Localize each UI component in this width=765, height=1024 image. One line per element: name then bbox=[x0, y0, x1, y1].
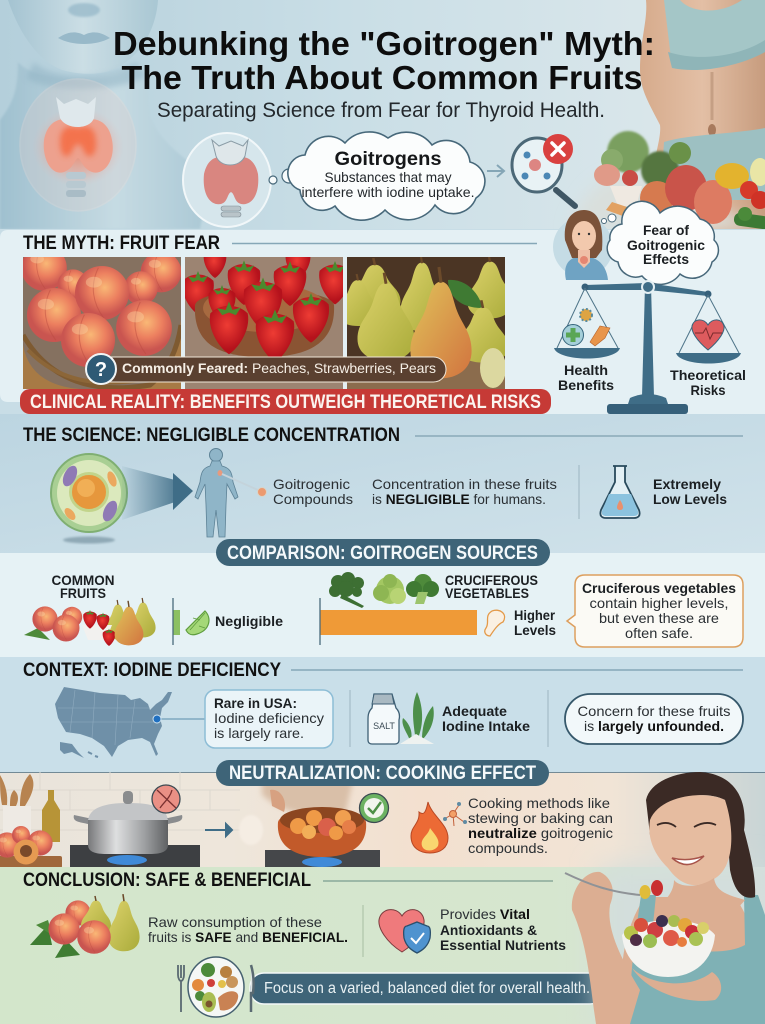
text: cooking methods: stewing or baking can bbox=[468, 810, 613, 826]
icon: human figure bbox=[195, 448, 266, 537]
thought cloud: fear of goitrogenic effects: Effects bbox=[643, 251, 689, 267]
thought cloud: fear of goitrogenic effects bbox=[602, 201, 718, 284]
icon: cruciferous vegetables bbox=[329, 572, 439, 608]
icon: health benefits bbox=[562, 309, 610, 346]
icon: salt shaker and seaweed bbox=[368, 692, 434, 744]
heading: context: CONTEXT: IODINE DEFICIENCY bbox=[23, 659, 281, 681]
text: cooking methods: compounds. bbox=[468, 840, 548, 856]
label: health benefits: Benefits bbox=[558, 377, 614, 393]
pill: concern unfounded: Concern for these fruits bbox=[578, 703, 730, 719]
text: adequate iodine intake: Adequate bbox=[442, 703, 507, 719]
banner: balanced diet: Focus on a varied, balanced diet for overall health. bbox=[264, 980, 590, 997]
text: cooking methods bbox=[468, 795, 613, 856]
text: goitrogenic compounds: Compounds bbox=[273, 491, 353, 507]
pill: concern unfounded: is largely unfounded. bbox=[584, 718, 724, 734]
text: adequate iodine intake bbox=[442, 703, 530, 734]
label: cruciferous vegetables bbox=[445, 572, 538, 601]
photo: utensils and jar bbox=[0, 774, 60, 842]
photo: steel pot on stove bbox=[70, 791, 200, 867]
callout: cruciferous note bbox=[567, 575, 743, 647]
text: adequate iodine intake: Iodine Intake bbox=[442, 718, 530, 734]
text: extremely low levels: Extremely bbox=[653, 476, 721, 492]
photo: dough bbox=[238, 816, 262, 844]
text: vital antioxidants: Provides Vital bbox=[440, 906, 530, 922]
bowl of fruit bbox=[622, 915, 721, 1001]
panel: the science bbox=[0, 414, 765, 554]
text: negligible concentration bbox=[372, 476, 557, 507]
label: health benefits bbox=[558, 362, 614, 393]
panel: cooking photo bbox=[0, 772, 765, 868]
icon: heart and shield bbox=[379, 910, 430, 953]
icon: lime slice bbox=[186, 611, 209, 635]
arm and fork bbox=[565, 872, 663, 1024]
illustration: fresh vegetables and fruit bbox=[570, 131, 765, 230]
icon: raw warning bbox=[152, 785, 180, 813]
panel: context bbox=[0, 657, 765, 773]
label pill: commonly feared: ? bbox=[95, 359, 107, 381]
icon: broccoli outline bbox=[485, 610, 505, 636]
photo: pears bbox=[347, 257, 505, 389]
illustration: face and neck with glowing thyroid bbox=[0, 0, 210, 229]
thought cloud: goitrogens definition: interfere with iodine uptake. bbox=[302, 184, 474, 200]
text: negligible concentration: is NEGLIGIBLE for humans. bbox=[372, 491, 546, 507]
card: rare in USA bbox=[205, 690, 333, 748]
heading pill: comparison: COMPARISON: GOITROGEN SOURCES bbox=[227, 543, 538, 564]
photo: peaches in basket bbox=[21, 245, 181, 389]
card: rare in USA: is largely rare. bbox=[214, 725, 304, 741]
icon: balanced plate with cutlery bbox=[178, 957, 254, 1017]
icon: flame and molecule bbox=[411, 802, 467, 853]
balance scale bbox=[554, 281, 746, 414]
banner: balanced diet bbox=[250, 973, 604, 1004]
label pill: commonly feared: Commonly Feared: Peaches, Strawberries, Pears bbox=[122, 360, 436, 376]
icon: peaches and pears bbox=[30, 894, 140, 958]
text: vital antioxidants: Antioxidants & bbox=[440, 922, 537, 938]
label: common fruits: FRUITS bbox=[60, 585, 106, 601]
text: higher levels bbox=[514, 607, 556, 638]
icon: cooked check bbox=[360, 794, 388, 822]
callout: cruciferous note: often safe. bbox=[625, 625, 693, 641]
icon: magnifier with red X bbox=[512, 134, 575, 206]
label: common fruits: COMMON bbox=[52, 572, 114, 588]
chart: higher levels bar bbox=[320, 598, 477, 645]
label: cruciferous vegetables: CRUCIFEROUS bbox=[445, 572, 538, 588]
text: cooking methods: Cooking methods like bbox=[468, 795, 610, 811]
text: higher levels: Higher bbox=[514, 607, 556, 623]
icon: plant cell bbox=[51, 454, 127, 544]
heading pill: neutralization: NEUTRALIZATION: COOKING EFFECT bbox=[229, 763, 536, 784]
title: The Truth About Common Fruits bbox=[122, 59, 642, 96]
arrow: to cooking bbox=[205, 824, 232, 836]
heading pill: comparison bbox=[216, 539, 550, 566]
text: raw consumption: Raw consumption of these bbox=[148, 914, 322, 930]
photo: woman eating fruit bbox=[565, 772, 765, 1024]
icon: worried woman bbox=[553, 210, 613, 280]
photo: pan of stewed peaches bbox=[265, 807, 380, 868]
label: theoretical risks bbox=[670, 367, 746, 398]
text: raw consumption: fruits is SAFE and BENEFICIAL. bbox=[148, 929, 348, 945]
chart: negligible bar bbox=[173, 598, 180, 645]
tank top and torso bbox=[622, 895, 765, 1024]
callout: cruciferous note: Cruciferous vegetables bbox=[582, 580, 736, 596]
text: raw consumption bbox=[148, 914, 348, 945]
banner: clinical reality: CLINICAL REALITY: BENEFITS OUTWEIGH THEORETICAL RISKS bbox=[30, 391, 541, 413]
text: goitrogenic compounds: Goitrogenic bbox=[273, 476, 350, 492]
heading: conclusion: CONCLUSION: SAFE & BENEFICIAL bbox=[23, 869, 311, 891]
text: negligible: Negligible bbox=[215, 613, 283, 629]
header panel bbox=[0, 0, 765, 230]
callout: cruciferous note: contain higher levels, bbox=[590, 595, 728, 611]
text: vital antioxidants: Essential Nutrients bbox=[440, 937, 566, 953]
callout: cruciferous note: but even these are bbox=[599, 610, 719, 626]
thought cloud: fear of goitrogenic effects: Fear of bbox=[643, 222, 689, 238]
pill: concern unfounded bbox=[565, 694, 743, 744]
text: extremely low levels: Low Levels bbox=[653, 491, 727, 507]
thought cloud: goitrogens definition bbox=[269, 132, 485, 220]
icon: salt shaker and seaweed: SALT bbox=[373, 721, 395, 731]
arrow: concentration bbox=[122, 466, 193, 520]
thought cloud: fear of goitrogenic effects: Goitrogenic bbox=[627, 237, 705, 253]
label: health benefits: Health bbox=[564, 362, 608, 378]
heading: the science: THE SCIENCE: NEGLIGIBLE CONCENTRATION bbox=[23, 424, 400, 446]
text: extremely low levels bbox=[653, 476, 727, 507]
subtitle: Separating Science from Fear for Thyroid Health. bbox=[157, 99, 605, 122]
photo: cook's hand bbox=[260, 786, 354, 812]
card: rare in USA: Iodine deficiency bbox=[214, 710, 324, 726]
text: goitrogenic compounds bbox=[273, 476, 353, 507]
icon: flask bbox=[600, 466, 640, 518]
icon: heart risk bbox=[692, 320, 724, 350]
arrow bbox=[487, 165, 504, 177]
thought cloud: goitrogens definition: Goitrogens bbox=[334, 149, 442, 170]
icon: common fruits group bbox=[24, 598, 156, 646]
panel: conclusion bbox=[0, 867, 765, 1024]
text: cooking methods: neutralize goitrogenic bbox=[468, 825, 613, 841]
label: theoretical risks: Risks bbox=[690, 382, 726, 398]
photo: peaches on board bbox=[0, 826, 62, 868]
title: Debunking the "Goitrogen" Myth: bbox=[113, 25, 655, 62]
illustration: torso and sports top bbox=[640, 0, 765, 229]
label pill: commonly feared bbox=[86, 354, 446, 384]
head bbox=[646, 772, 755, 921]
map: USA bbox=[55, 687, 205, 758]
card: rare in USA: Rare in USA: bbox=[214, 695, 297, 711]
thought cloud: goitrogens definition: Substances that may bbox=[324, 169, 452, 185]
icon: thyroid in bubble bbox=[183, 133, 271, 227]
label: theoretical risks: Theoretical bbox=[670, 367, 746, 383]
label: common fruits bbox=[52, 572, 114, 601]
label: cruciferous vegetables: VEGETABLES bbox=[445, 585, 529, 601]
photo: strawberries in bowl bbox=[185, 257, 343, 389]
text: vital antioxidants bbox=[440, 906, 566, 953]
text: higher levels: Levels bbox=[514, 622, 556, 638]
panel: the myth bbox=[0, 201, 765, 414]
title bbox=[115, 31, 652, 90]
heading: the myth: THE MYTH: FRUIT FEAR bbox=[23, 232, 220, 254]
panel: comparison bbox=[0, 553, 765, 657]
text: negligible concentration: Concentration in these fruits bbox=[372, 476, 557, 492]
